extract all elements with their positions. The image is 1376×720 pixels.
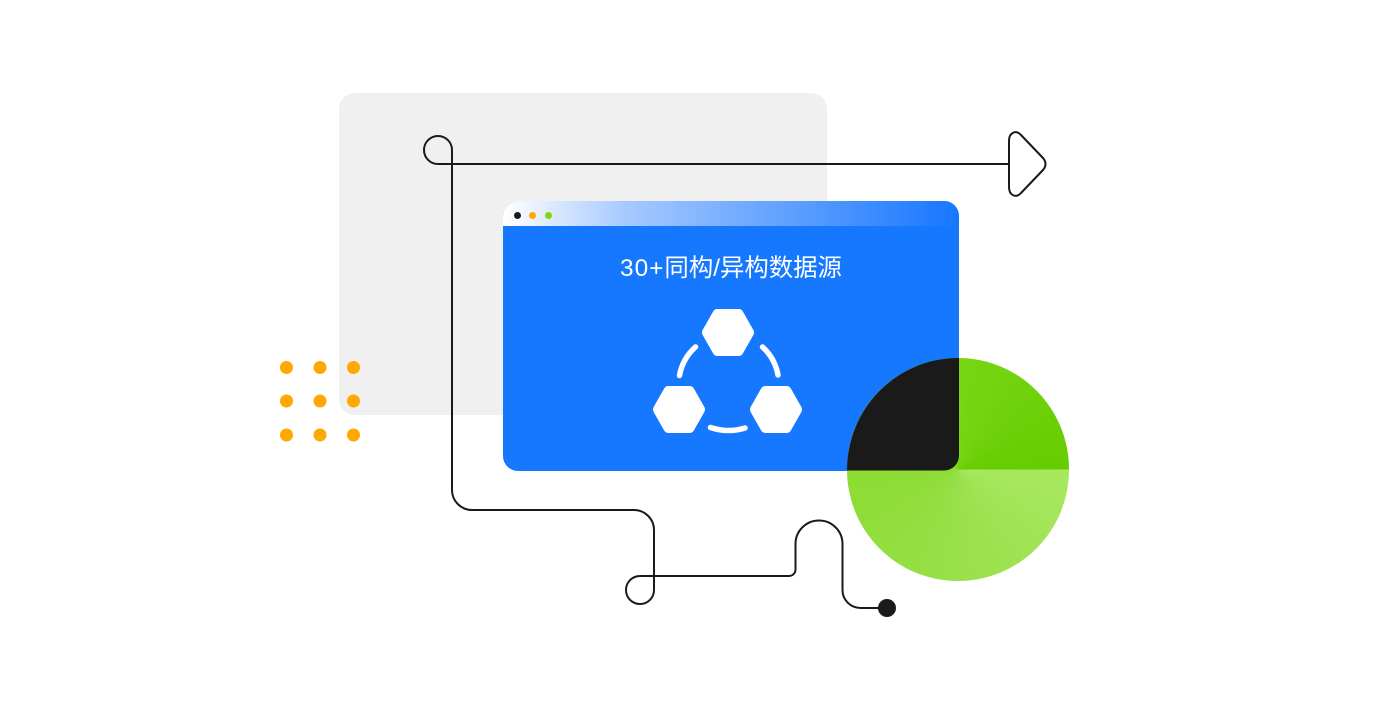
green pie circle: [847, 358, 1068, 580]
window control dot: orange: [529, 212, 536, 219]
window control dot: green: [545, 212, 552, 219]
panel: gray background card: [339, 93, 827, 415]
orange dot grid: [280, 361, 360, 442]
window title bar: [503, 201, 959, 226]
icon: three hexagons linked in a cycle: [652, 309, 802, 434]
icon: triangle arrow head: [1008, 131, 1046, 197]
connector end dot: [878, 599, 896, 617]
window control dot: black: [514, 212, 520, 219]
black overlap of circle and window: [847, 358, 959, 470]
heading: data source title: 30+同构/异构数据源: [620, 255, 842, 282]
connector line: [424, 136, 1009, 608]
panel: blue data source window: [503, 201, 959, 470]
